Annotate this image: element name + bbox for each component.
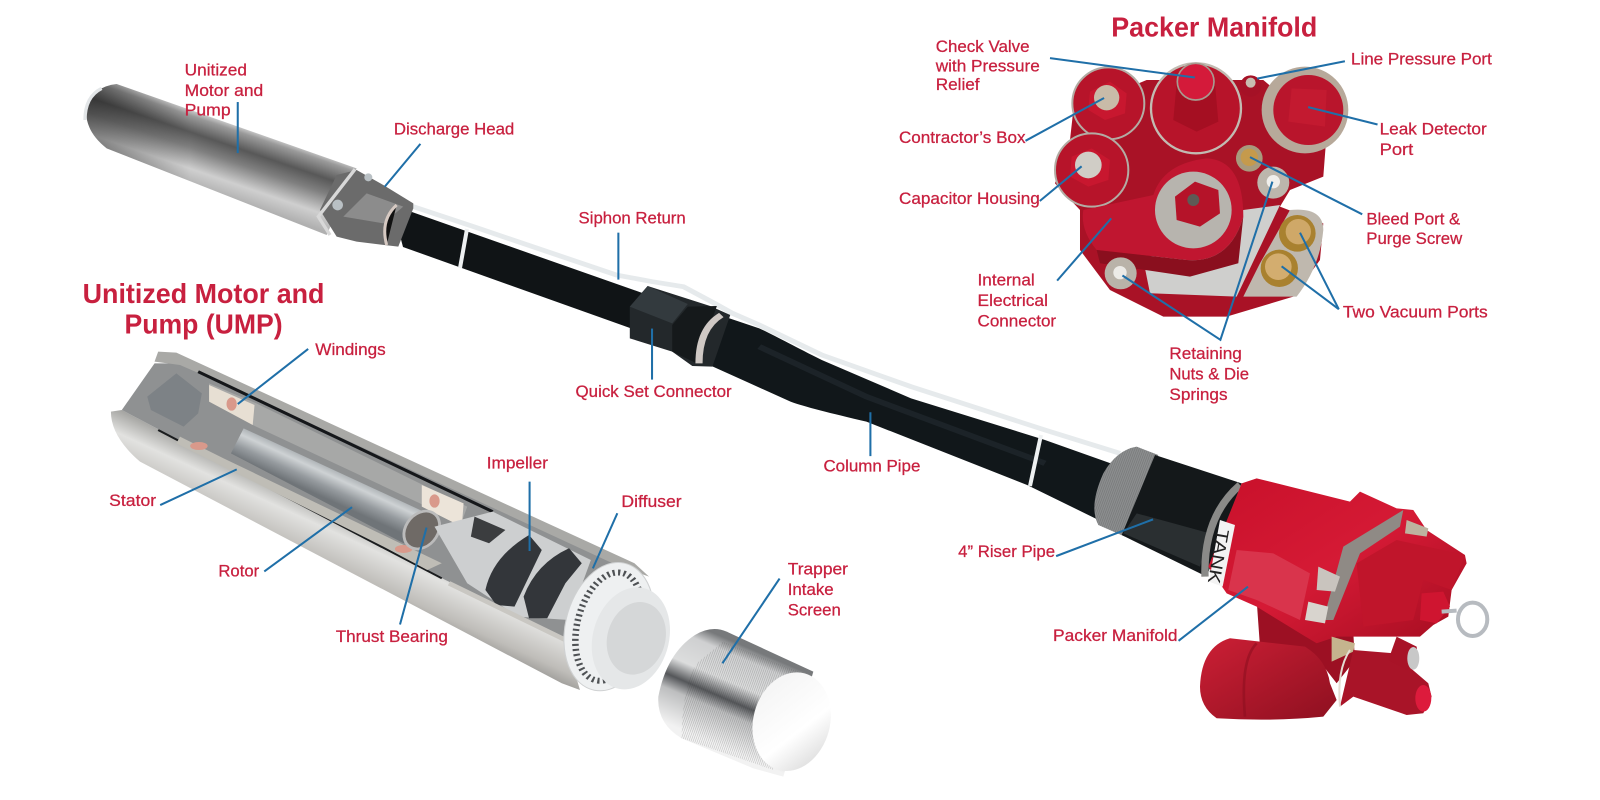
column pipe assembly bbox=[392, 200, 1120, 520]
upper stator band bbox=[209, 383, 467, 527]
pump chamber bbox=[435, 512, 591, 620]
label: Impeller: Impeller bbox=[487, 454, 549, 472]
black gap bbox=[198, 372, 493, 512]
label: Discharge Head: Discharge Head bbox=[394, 121, 514, 139]
UMP cutaway bbox=[111, 352, 680, 699]
threads bbox=[1094, 447, 1158, 537]
label: Check Valve: Check Valve bbox=[936, 38, 1030, 56]
neck between body and lower chamber bbox=[1257, 600, 1355, 683]
label: Capacitor Housing bbox=[899, 166, 1082, 208]
trapper intake screen bbox=[658, 629, 842, 780]
discharge pipe collar bbox=[385, 205, 397, 245]
label: Capacitor Housing: Capacitor Housing bbox=[899, 190, 1040, 208]
rotor bbox=[231, 428, 427, 543]
lower chamber bbox=[1200, 638, 1337, 720]
label: Column Pipe: Column Pipe bbox=[823, 457, 920, 475]
packer manifold (assembled): TANK bbox=[1204, 528, 1233, 586]
label: Stator: Stator bbox=[109, 492, 157, 510]
vacuum port plate bbox=[1243, 210, 1323, 297]
check valve bbox=[1151, 63, 1241, 153]
label: Packer Manifold callout bbox=[1053, 587, 1248, 645]
eye bolt bbox=[1442, 605, 1457, 618]
flange plate bbox=[1323, 510, 1403, 620]
lower gap bbox=[158, 430, 442, 578]
label: Trapper Intake Screen: Intake bbox=[788, 581, 834, 599]
label: Diffuser: Diffuser bbox=[621, 493, 682, 511]
label: Rotor: Rotor bbox=[218, 563, 260, 581]
label: Retaining Nuts and Die Springs: Springs bbox=[1169, 386, 1228, 404]
label: Retaining Nuts and Die Springs: Nuts & Die bbox=[1169, 366, 1249, 384]
label: Check Valve bbox=[935, 38, 1195, 94]
riser pipe bbox=[1094, 447, 1242, 577]
right chamber shading bbox=[1357, 540, 1465, 627]
end disc bbox=[582, 580, 680, 696]
label: Two Vacuum Ports bbox=[1282, 233, 1488, 321]
manifold base bbox=[1055, 80, 1327, 317]
label: Windings bbox=[238, 341, 386, 404]
label: Leak Detector Port: Leak Detector bbox=[1380, 121, 1487, 139]
title: UMP: Unitized Motor and bbox=[83, 278, 324, 309]
label: Contractor's Box: Contractor’s Box bbox=[899, 129, 1026, 147]
white straps bbox=[460, 229, 1041, 486]
label: Internal Electrical Connector: Connector bbox=[978, 313, 1057, 331]
label: Trapper Intake Screen bbox=[722, 560, 849, 663]
label: Retaining Nuts and Die Springs bbox=[1122, 182, 1272, 404]
screen body bbox=[658, 629, 813, 777]
bleed port bbox=[1236, 145, 1263, 172]
eye ring bbox=[1458, 603, 1487, 636]
label: Trapper Intake Screen: Trapper bbox=[788, 560, 849, 578]
nameplates bbox=[1143, 205, 1280, 297]
body highlight bbox=[1228, 550, 1310, 620]
lower stator band bbox=[176, 437, 442, 570]
die spring nuts bbox=[1257, 167, 1289, 199]
pipe sheen bbox=[759, 347, 1045, 463]
black riser body bbox=[1122, 455, 1242, 577]
label: 4 inch Riser Pipe: 4” Riser Pipe bbox=[958, 543, 1055, 561]
label: Unitized Motor and Pump: Pump bbox=[185, 101, 231, 119]
nose bbox=[1420, 592, 1450, 623]
upper column pipe bbox=[392, 205, 648, 328]
bolts bbox=[1317, 567, 1340, 592]
packer manifold (assembled) bbox=[1200, 478, 1487, 720]
main body bbox=[1208, 478, 1467, 643]
quick set connector bbox=[630, 286, 730, 367]
label: Bleed Port and Purge Screw: Purge Screw bbox=[1366, 230, 1462, 248]
tank label bbox=[1209, 520, 1235, 587]
chamber step bbox=[1244, 643, 1257, 717]
label: Leak Detector Port: Port bbox=[1380, 141, 1414, 159]
interior bbox=[122, 363, 627, 640]
lower shell rim bbox=[449, 583, 565, 640]
red tip bbox=[1415, 685, 1431, 712]
end parts bbox=[147, 373, 202, 427]
unitized motor and pump (exterior) bbox=[85, 84, 413, 247]
label: Line Pressure Port: Line Pressure Port bbox=[1351, 50, 1492, 68]
label: Contractor's Box bbox=[899, 98, 1104, 147]
label: Retaining Nuts and Die Springs: Retaining bbox=[1169, 345, 1242, 363]
label: Impeller bbox=[487, 454, 549, 551]
label: 4 inch Riser Pipe bbox=[958, 519, 1153, 561]
label: Diffuser bbox=[593, 493, 682, 568]
intake end cap bbox=[552, 555, 666, 699]
label: Siphon Return: Siphon Return bbox=[579, 209, 686, 227]
lower column pipe bbox=[706, 313, 1120, 520]
label: Discharge Head bbox=[385, 121, 514, 187]
title: Packer Manifold: Packer Manifold bbox=[1111, 12, 1317, 43]
label: Siphon Return bbox=[579, 209, 686, 280]
small cap bbox=[1388, 637, 1418, 670]
label: Thrust Bearing: Thrust Bearing bbox=[336, 628, 448, 646]
label: Trapper Intake Screen: Screen bbox=[788, 601, 841, 619]
rear nose bbox=[1340, 650, 1432, 715]
label: Leak Detector Port bbox=[1308, 107, 1487, 159]
packer manifold (top view) bbox=[1055, 63, 1348, 317]
labels and leader lines bbox=[83, 12, 1492, 663]
label: Thrust Bearing bbox=[336, 528, 448, 646]
label: Internal Electrical Connector: Electrical bbox=[978, 292, 1048, 310]
connector shadow bbox=[1097, 217, 1243, 277]
title: UMP: Pump (UMP) bbox=[124, 309, 283, 340]
impellers bbox=[485, 535, 542, 607]
label: Quick Set Connector: Quick Set Connector bbox=[576, 383, 732, 401]
siphon return tube bbox=[393, 200, 1120, 453]
threads bbox=[682, 642, 807, 770]
label: Line Pressure Port bbox=[1257, 50, 1492, 79]
label: Packer Manifold callout: Packer Manifold bbox=[1053, 627, 1178, 645]
capacitor housing bbox=[1055, 133, 1128, 207]
upper shell bbox=[155, 352, 649, 577]
label: Stator bbox=[109, 469, 237, 510]
leak detector port bbox=[1262, 67, 1348, 153]
label: Column Pipe bbox=[823, 412, 920, 475]
steel tube bbox=[86, 84, 357, 235]
label: Check Valve: Relief bbox=[936, 76, 980, 94]
label: Check Valve: with Pressure bbox=[935, 57, 1040, 75]
label: Unitized Motor and Pump: Unitized bbox=[185, 62, 247, 80]
label: Internal Electrical Connector bbox=[978, 218, 1111, 331]
contractor's box bbox=[1072, 67, 1144, 139]
lower shell bbox=[111, 410, 580, 690]
label: Unitized Motor and Pump bbox=[185, 62, 263, 153]
riser collar bbox=[1205, 485, 1240, 577]
discharge head bbox=[320, 170, 413, 247]
title: UMP bbox=[83, 278, 324, 340]
label: Two Vacuum Ports: Two Vacuum Ports bbox=[1343, 303, 1488, 321]
tube left shadow bbox=[86, 84, 357, 235]
label: Bleed Port and Purge Screw bbox=[1250, 157, 1462, 248]
label: Windings: Windings bbox=[315, 341, 386, 359]
vacuum ports bbox=[1279, 215, 1316, 252]
label: Rotor bbox=[218, 507, 352, 581]
polished end disc bbox=[742, 663, 842, 780]
label: Internal Electrical Connector: Internal bbox=[978, 272, 1035, 290]
label: Bleed Port and Purge Screw: Bleed Port & bbox=[1366, 210, 1460, 228]
tube end highlight bbox=[85, 88, 102, 120]
electrical connector arm bbox=[1083, 158, 1243, 260]
line pressure port bbox=[1240, 75, 1261, 97]
label: Unitized Motor and Pump: Motor and bbox=[185, 82, 263, 100]
